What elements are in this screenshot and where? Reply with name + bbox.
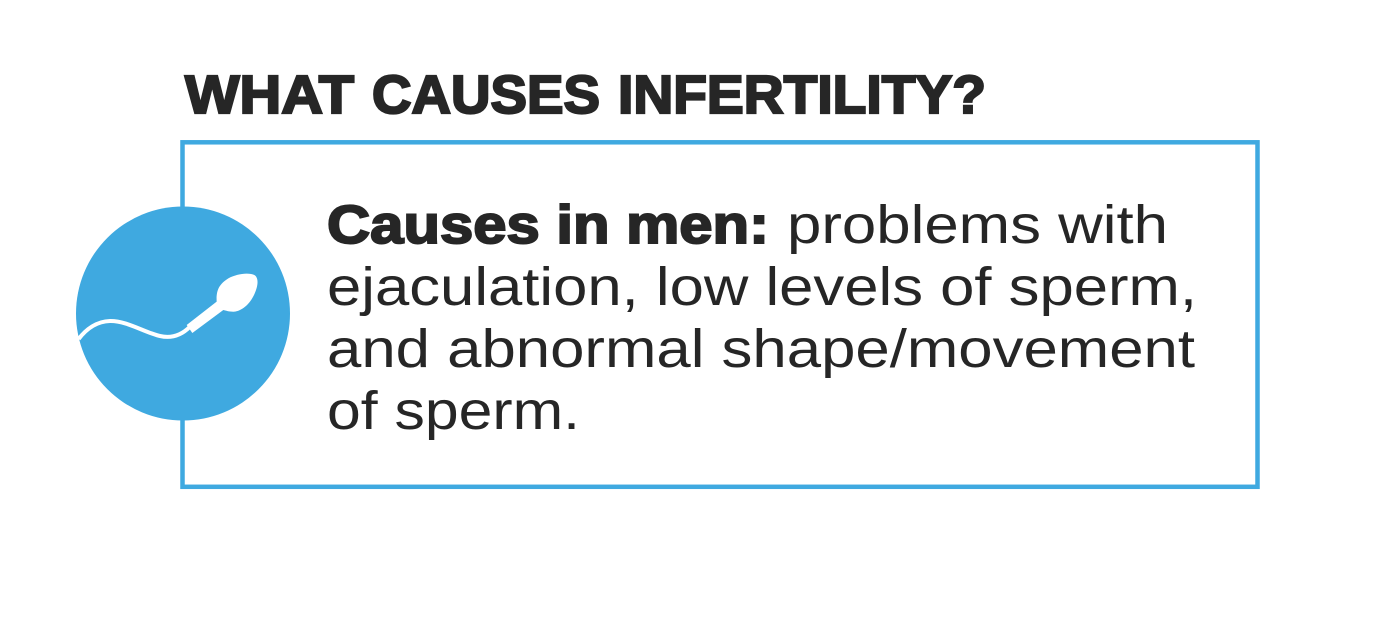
icon: sperm in blue circle xyxy=(76,206,290,420)
title: CAUSES xyxy=(372,65,600,125)
title: WHAT xyxy=(185,65,354,125)
title xyxy=(185,65,986,125)
text block: causes in men xyxy=(327,195,1197,441)
text block: causes in men: Causes in men: xyxy=(327,195,769,255)
text block: causes in men: problems with xyxy=(787,195,1168,255)
text block: causes in men: ejaculation, low levels of sperm, xyxy=(327,257,1197,317)
text block: causes in men: and abnormal shape/movement xyxy=(327,319,1195,379)
panel: causes in men xyxy=(182,142,1258,487)
text block: causes in men: of sperm. xyxy=(327,381,580,441)
title: INFERTILITY? xyxy=(618,65,986,125)
